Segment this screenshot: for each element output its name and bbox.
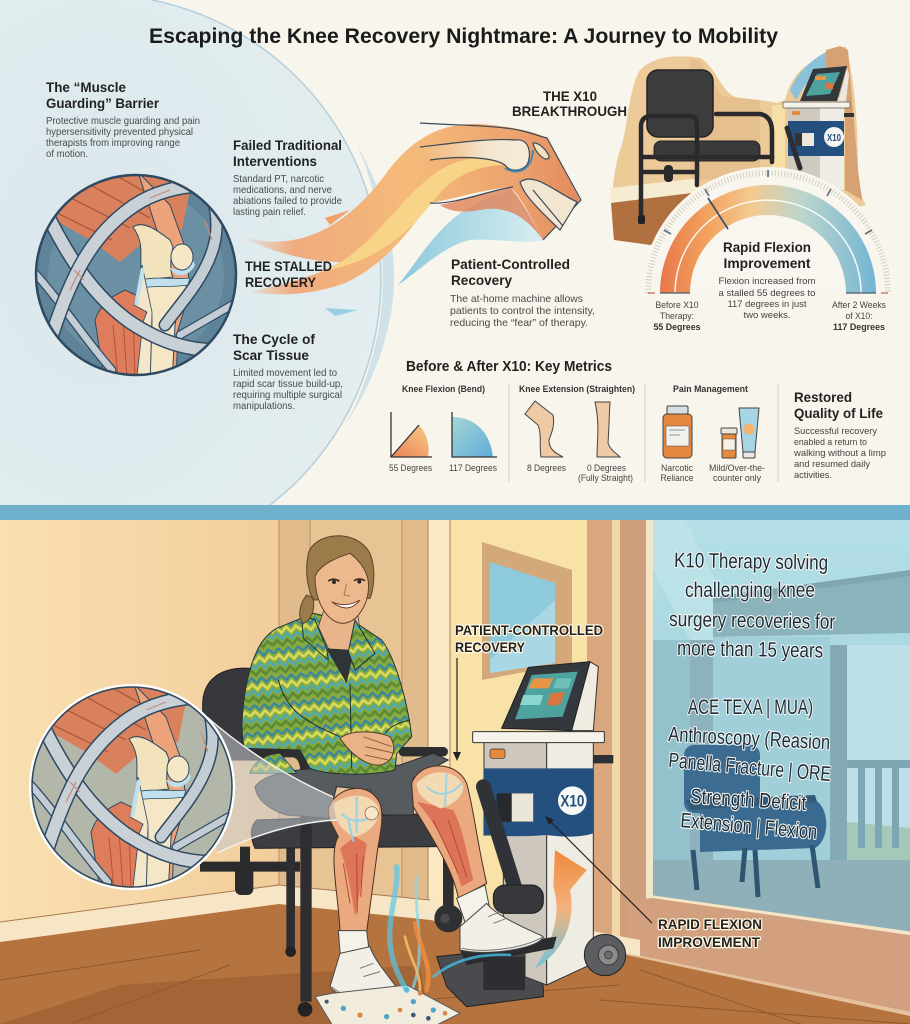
door frame and glass	[620, 520, 910, 1018]
text: restored quality of life	[793, 389, 886, 481]
divider band	[0, 505, 910, 520]
panel: knee extension metric: 8 Degrees	[527, 463, 566, 474]
machine tower: X10	[560, 792, 584, 811]
text: K10 therapy window message	[668, 549, 835, 844]
text: rapid flexion improvement: Improvement	[724, 255, 811, 271]
illustration: bent knee	[420, 123, 581, 240]
heading: the stalled recovery: THE STALLED	[245, 258, 332, 274]
illustration: seated patient with knee machine	[200, 536, 626, 1024]
panel: knee flexion metric: 117 Degrees	[449, 463, 497, 474]
text: failed traditional interventions: Failed Traditional	[233, 137, 342, 153]
text: muscle guarding barrier: The “Muscle	[46, 79, 126, 95]
label: after 2 weeks: 117 Degrees	[833, 322, 885, 333]
text: rapid flexion improvement: 117 degrees in just	[728, 299, 807, 310]
text: patient-controlled recovery: patients to control the intensity,	[450, 305, 595, 317]
text: the cycle of scar tissue: manipulations.	[233, 400, 295, 412]
text: restored quality of life: Restored	[794, 389, 852, 405]
machine pedal arm	[483, 787, 543, 913]
text: the cycle of scar tissue: requiring multiple surgical	[233, 389, 342, 401]
panel: pain management metric: counter only	[713, 473, 761, 484]
text: rapid flexion improvement	[718, 239, 816, 321]
text: restored quality of life: and resumed daily	[794, 459, 870, 470]
arrow: rapid flexion pointer	[545, 816, 652, 923]
label: after 2 weeks: of X10:	[846, 311, 872, 322]
panel: pain management metric: Narcotic	[661, 463, 693, 474]
porch structure outside	[653, 520, 910, 933]
text: the cycle of scar tissue: The Cycle of	[233, 331, 315, 347]
text: failed traditional interventions: Interventions	[233, 153, 317, 169]
text: restored quality of life: walking without a limp	[793, 448, 886, 459]
text: muscle guarding barrier: Guarding” Barrier	[46, 95, 160, 111]
foot plate	[315, 985, 460, 1024]
label: after 2 weeks	[832, 300, 886, 333]
label: patient-controlled recovery: PATIENT-CONTROLLED	[455, 622, 603, 638]
heading: the X10 breakthrough: BREAKTHROUGH	[512, 103, 627, 119]
illustration: chair and X10 machine vignette	[610, 46, 866, 245]
text: the cycle of scar tissue: Limited movement led to	[233, 367, 337, 379]
panel: knee extension metric: (Fully Straight)	[578, 473, 633, 484]
illustration: knee with scar tissue	[37, 176, 235, 374]
patient leg with anatomy: right	[412, 766, 487, 898]
text: failed traditional interventions: abiations failed to provide	[233, 195, 342, 207]
label: before X10: 55 Degrees	[654, 322, 700, 333]
text: rapid flexion improvement: Flexion increased from	[718, 276, 816, 287]
label: before X10: Before X10	[656, 300, 698, 311]
patient shorts	[255, 753, 448, 818]
blue chair outside	[684, 745, 826, 897]
zoom lens cone	[207, 717, 337, 853]
patient hands	[340, 732, 395, 765]
text: K10 therapy window message: ACE TEXA | MUA)	[688, 696, 813, 719]
panel: the stalled recovery	[0, 0, 394, 505]
machine touch screen	[502, 662, 598, 731]
icon: ointment tube	[739, 408, 759, 458]
text: K10 therapy window message: more than 15 years	[677, 637, 823, 663]
heading: the stalled recovery	[245, 258, 332, 290]
panel: patient at home scene	[0, 520, 910, 1024]
text: patient-controlled recovery: The at-home machine allows	[450, 293, 583, 305]
panel: knee extension metric	[519, 384, 635, 484]
text: muscle guarding barrier: hypersensitivity prevented physical	[46, 126, 193, 138]
energy wisps	[390, 867, 510, 990]
zoomed knee ring	[30, 685, 234, 889]
machine base	[434, 904, 543, 1007]
machine tower	[473, 732, 626, 985]
panel: pain management metric: Pain Management	[673, 384, 748, 394]
label: rapid flexion improvement: IMPROVEMENT	[658, 934, 760, 950]
label: rapid flexion improvement: RAPID FLEXION	[658, 916, 762, 932]
heading: key metrics: Before & After X10: Key Metrics	[406, 359, 612, 375]
chart: rapid flexion gauge	[642, 167, 894, 293]
heading: the X10 breakthrough: THE X10	[543, 88, 597, 104]
room walls	[0, 520, 620, 960]
text: K10 therapy window message: Strength Deficit	[690, 785, 807, 815]
label: patient-controlled recovery: RECOVERY	[455, 639, 526, 655]
icon: X10 machine: X10	[827, 133, 841, 144]
label: after 2 weeks: After 2 Weeks	[832, 300, 886, 311]
text: restored quality of life: activities.	[794, 470, 832, 481]
label: patient-controlled recovery	[455, 622, 603, 655]
panel: knee extension metric: 0 Degrees	[587, 463, 626, 474]
text: rapid flexion improvement: a stalled 55 degrees to	[718, 288, 816, 299]
icon: black chair	[638, 70, 772, 224]
text: K10 therapy window message: surgery recoveries for	[669, 608, 835, 634]
label: before X10: Therapy:	[660, 311, 694, 322]
text: muscle guarding barrier	[46, 79, 200, 160]
text: restored quality of life: Quality of Life	[794, 405, 883, 421]
text: K10 therapy window message: K10 Therapy solving	[674, 549, 828, 575]
heading: the stalled recovery: RECOVERY	[245, 274, 317, 290]
right sock, shoe and pedal	[457, 885, 557, 965]
label: rapid flexion improvement	[658, 916, 762, 950]
text: restored quality of life: enabled a return to	[794, 437, 867, 448]
text: K10 therapy window message: Panella Fracture | ORE	[668, 749, 832, 786]
left sock and shoe	[330, 930, 396, 992]
label: before X10	[654, 300, 700, 333]
text: the cycle of scar tissue: rapid scar tissue build-up,	[233, 378, 343, 390]
illustration: zoomed knee	[25, 680, 240, 897]
text: patient-controlled recovery: Recovery	[451, 272, 512, 288]
icon: X10 machine	[783, 66, 854, 190]
text: K10 therapy window message: Extension | Flexion	[680, 809, 818, 844]
floor	[0, 885, 910, 1024]
text: patient-controlled recovery	[450, 256, 595, 329]
panel: knee flexion metric: 55 Degrees	[389, 463, 432, 474]
arrow: patient control pointer	[453, 658, 461, 761]
text: failed traditional interventions: medications, and nerve	[233, 184, 332, 196]
arrow: flowing transition from stalled knee to X10	[240, 123, 581, 316]
panel: knee flexion metric: Knee Flexion (Bend)	[402, 384, 485, 394]
text: muscle guarding barrier: Protective muscle guarding and pain	[46, 115, 200, 127]
title: Escaping the Knee Recovery Nightmare: A Journey to Mobility	[149, 25, 778, 48]
text: the cycle of scar tissue: Scar Tissue	[233, 347, 309, 363]
text: K10 therapy window message: challenging knee	[685, 579, 815, 602]
knee circle outline	[36, 175, 236, 375]
panel: pain management metric	[660, 384, 765, 484]
panel: knee extension metric: Knee Extension (Straighten)	[519, 384, 635, 394]
text: K10 therapy window message: Anthroscopy (Reasion	[668, 723, 831, 754]
heading: the X10 breakthrough	[512, 88, 627, 119]
panel: pain management metric: Reliance	[660, 473, 694, 484]
panel: pain management metric: Mild/Over-the-	[709, 463, 765, 474]
text: muscle guarding barrier: therapists from improving range	[46, 137, 180, 149]
page background	[0, 0, 910, 520]
text: the cycle of scar tissue	[233, 331, 343, 412]
text: restored quality of life: Successful recovery	[794, 426, 877, 437]
patient head and neck	[300, 536, 375, 683]
icon: mild medication bottle	[721, 428, 737, 458]
panel: knee flexion metric	[389, 384, 497, 474]
text: failed traditional interventions: lasting pain relief.	[233, 206, 306, 218]
chair	[200, 668, 448, 1017]
text: patient-controlled recovery: Patient-Controlled	[451, 256, 570, 272]
patient leg with anatomy: left	[328, 788, 382, 932]
text: muscle guarding barrier: of motion.	[46, 148, 88, 160]
text: rapid flexion improvement: two weeks.	[744, 310, 790, 321]
text: failed traditional interventions: Standard PT, narcotic	[233, 173, 324, 185]
patient jacket	[242, 613, 412, 774]
text: rapid flexion improvement: Rapid Flexion	[723, 239, 811, 255]
text: patient-controlled recovery: reducing the “fear” of therapy.	[450, 317, 588, 329]
wall picture window	[482, 542, 572, 680]
text: failed traditional interventions	[233, 137, 342, 218]
icon: narcotic bottle	[663, 406, 692, 458]
